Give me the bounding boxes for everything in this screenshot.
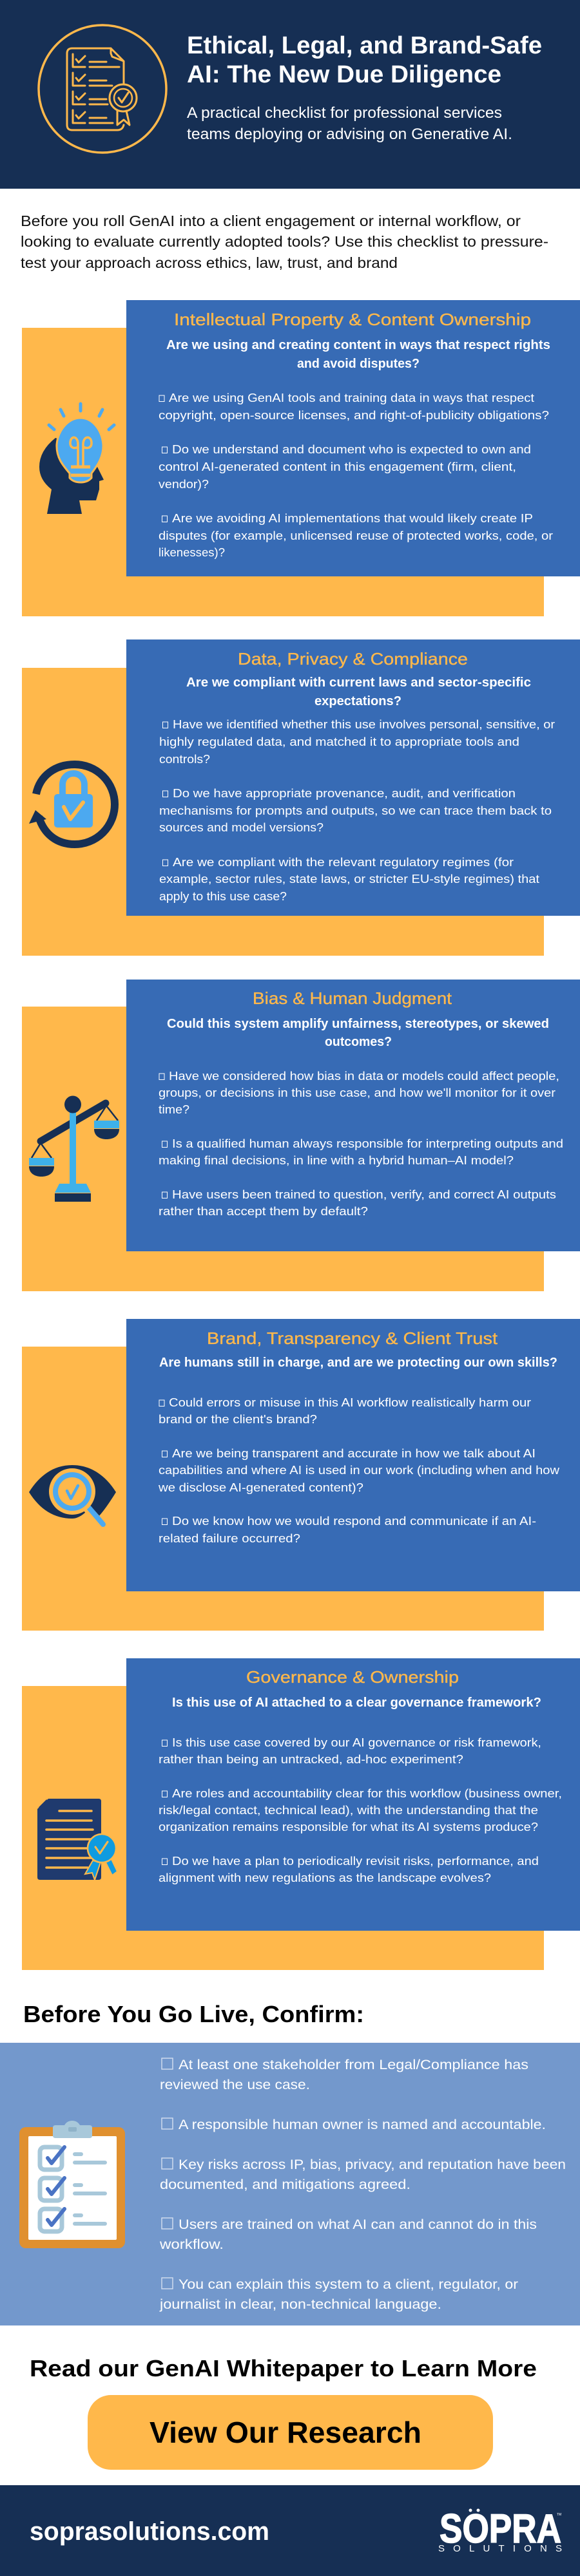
question: Are we using and creating content in ways that respect rights [166,337,550,352]
intro paragraph: looking to evaluate currently adopted tools? Use this checklist to pressure- [21,233,548,250]
button: view our research: View Our Research [150,2416,421,2449]
checklist items: Have we considered how bias in data or models could affect people, [169,1069,559,1083]
icon: head with light bulb [39,404,114,514]
panel: brand transparency [22,1319,580,1631]
heading: Governance & Ownership [246,1667,459,1687]
question: expectations? [314,694,401,708]
logo: Sopra Solutions: SOLUTIONS [438,2543,562,2554]
subtitle: A practical checklist for professional services [187,104,502,122]
intro paragraph: test your approach across ethics, law, trust, and brand [21,254,398,271]
checklist items: time? [159,1103,189,1116]
panel: data privacy [22,639,580,956]
icon: clipboard checklist [19,2121,125,2248]
icon: checklist document with seal [39,25,166,153]
heading: Data, Privacy & Compliance [238,649,468,668]
checklist items: copyright, open-source licenses, and right-of-publicity obligations? [159,408,549,422]
checklist items: control AI-generated content in this engagement (firm, client, [159,460,516,473]
logo: Sopra Solutions: TM [557,2513,561,2517]
checklist items: Are we avoiding AI implementations that would likely create IP [172,511,533,525]
checklist items: Have we identified whether this use involves personal, sensitive, or [173,717,555,731]
checklist items: Is this use case covered by our AI governance or risk framework, [172,1736,541,1749]
checklist items: Do we understand and document who is expected to own and [172,442,531,456]
intro paragraph: Before you roll GenAI into a client engagement or internal workflow, or [21,213,521,229]
checklist items: rather than being an untracked, ad-hoc experiment? [159,1752,463,1766]
question: Are humans still in charge, and are we protecting our own skills? [159,1355,557,1370]
checklist items [159,391,553,559]
checklist items: Do we have appropriate provenance, audit, and verification [173,786,516,800]
panel: bias and human judgment [22,980,580,1291]
panel: final confirmation [0,2043,580,2325]
checklist items: vendor)? [159,477,209,491]
checklist items: At least one stakeholder from Legal/Compliance has [179,2057,528,2072]
checklist items [159,1069,563,1218]
subtitle [187,104,512,143]
checklist items: You can explain this system to a client, regulator, or [179,2277,518,2292]
checklist items: brand or the client's brand? [159,1412,317,1426]
icon: padlock with circular arrow [29,764,115,844]
question: Could this system amplify unfairness, stereotypes, or skewed [167,1016,549,1031]
checklist items: Are roles and accountability clear for this workflow (business owner, [172,1786,562,1800]
checklist items: controls? [159,752,210,766]
question: Are we compliant with current laws and sector-specific [186,675,531,690]
heading: before you go live: Before You Go Live, Confirm: [23,2001,364,2027]
checklist items: likenesses)? [159,545,225,559]
heading: Brand, Transparency & Client Trust [207,1329,498,1348]
checklist items: Do we have a plan to periodically revisit risks, performance, and [172,1854,539,1868]
checklist items: making final decisions, in line with a hybrid human–AI model? [159,1153,514,1167]
logo: Sopra Solutions: SOPRA [440,2506,561,2552]
checklist items: risk/legal contact, technical lead), with the understanding that the [159,1803,538,1817]
button: view our research [88,2395,493,2470]
question: Is this use of AI attached to a clear governance framework? [172,1695,541,1710]
call to action heading: Read our GenAI Whitepaper to Learn More [30,2355,537,2382]
checklist items: Is a qualified human always responsible for interpreting outputs and [172,1137,563,1150]
checklist items [158,1396,560,1545]
checklist items [159,717,555,903]
checklist items: Are we using GenAI tools and training data in ways that respect [169,391,534,404]
subtitle: teams deploying or advising on Generative AI. [187,126,512,143]
checklist items [159,1736,562,1884]
header banner [0,0,580,189]
checklist items: Have users been trained to question, verify, and correct AI outputs [172,1188,556,1201]
question [167,1016,549,1049]
checklist items: Users are trained on what AI can and cannot do in this [179,2217,537,2232]
checklist items: rather than accept them by default? [159,1204,368,1218]
icon: tilted scales [29,1096,119,1202]
checklist items: related failure occurred? [159,1531,300,1545]
checklist items: organization remains responsible for what its AI systems produce? [159,1820,538,1833]
checklist items: sources and model versions? [159,820,324,834]
checklist items: groups, or decisions in this use case, and how we'll monitor for it over [159,1086,556,1099]
checklist items: journalist in clear, non-technical language. [159,2297,441,2312]
panel: governance [22,1658,580,1970]
checklist items: disputes (for example, unlicensed reuse of protected works, code, or [159,529,553,542]
panel: intellectual property [22,300,580,616]
checklist items: mechanisms for prompts and outputs, so we can trace them back to [159,804,552,817]
checklist items: capabilities and where AI is used in our work (including when and how [159,1463,560,1477]
checklist items: we disclose AI-generated content)? [158,1481,363,1494]
title: AI: The New Due Diligence [187,61,501,88]
title: Ethical, Legal, and Brand-Safe [187,32,542,59]
icon: eye with magnifier [29,1465,116,1526]
checklist items: highly regulated data, and matched it to appropriate tools and [159,735,519,748]
checklist items: apply to this use case? [159,889,287,903]
checklist items: Do we know how we would respond and communicate if an AI- [172,1514,536,1528]
checklist items: documented, and mitigations agreed. [160,2177,411,2192]
question: outcomes? [325,1034,392,1049]
checklist items: Key risks across IP, bias, privacy, and reputation have been [179,2157,566,2172]
heading: Bias & Human Judgment [253,989,452,1008]
checklist items: Are we being transparent and accurate in how we talk about AI [172,1446,536,1460]
checklist items: reviewed the use case. [160,2077,310,2092]
heading: Intellectual Property & Content Ownership [174,310,531,329]
question [186,675,531,708]
title [187,32,542,88]
question: and avoid disputes? [297,356,420,371]
checklist items: Could errors or misuse in this AI workflow realistically harm our [169,1396,531,1409]
checklist items: workflow. [159,2237,224,2252]
website: soprasolutions.com [30,2517,269,2546]
icon: document with rosette [37,1799,117,1880]
checklist items: alignment with new regulations as the landscape evolves? [159,1871,491,1884]
question [166,337,550,371]
checklist items [159,2057,566,2312]
intro paragraph [21,213,548,271]
checklist items: example, sector rules, state laws, or stricter EU-style regimes) that [159,872,539,886]
footer [0,2485,580,2576]
checklist items: Are we compliant with the relevant regulatory regimes (for [173,855,514,869]
checklist items: A responsible human owner is named and accountable. [179,2117,546,2132]
